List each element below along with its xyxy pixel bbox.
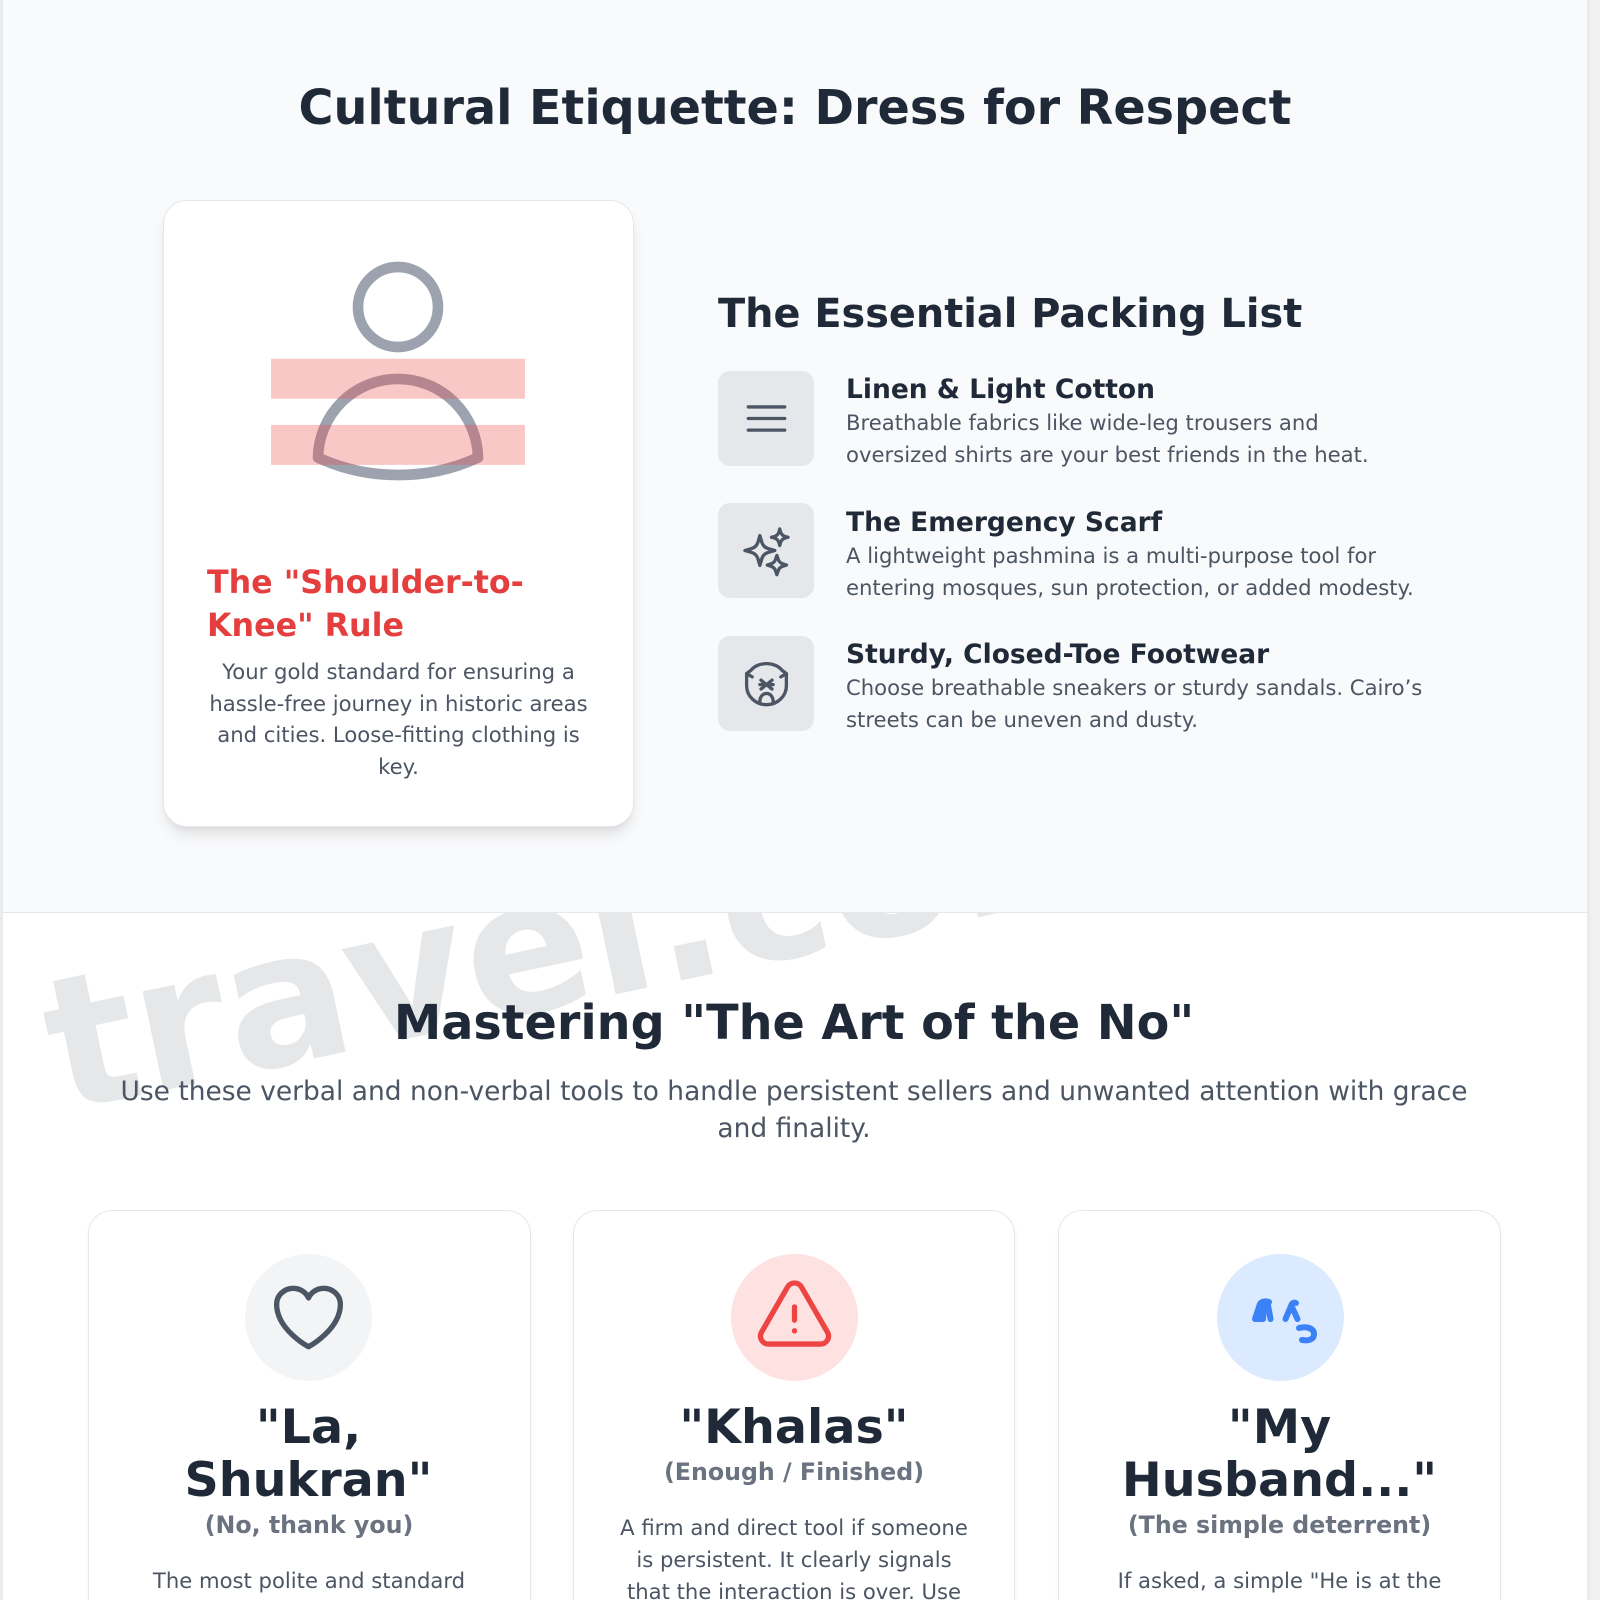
item: scarf: The Emergency Scarf: [846, 507, 1162, 538]
khalas text: is persistent. It clearly signals: [636, 1547, 952, 1572]
item: footwear: Sturdy, Closed-Toe Footwear: [846, 639, 1269, 670]
card heading: [207, 565, 524, 644]
intro text: Use these verbal and non-verbal tools to handle persistent sellers and unwanted attention with grace: [120, 1076, 1468, 1107]
icon: footwear: [718, 636, 814, 731]
card text: [209, 659, 588, 779]
panel: la shukran: [88, 1210, 531, 1600]
la shukran heading: [185, 1400, 432, 1508]
watermark: travel.com: [26, 712, 1161, 1155]
icon: heart: [245, 1254, 372, 1381]
heading: packing list: The Essential Packing List: [718, 291, 1302, 337]
my husband subtitle: (The simple deterrent): [1128, 1511, 1431, 1539]
panel: shoulder-to-knee rule card: [163, 200, 634, 827]
la shukran heading: Shukran": [185, 1453, 432, 1508]
panel: my husband: [1058, 1210, 1501, 1600]
title: Cultural Etiquette: Dress for Respect: [299, 81, 1291, 136]
section: art of the no: [3, 913, 1587, 1600]
icon: linen: [718, 371, 814, 466]
khalas text: [620, 1515, 968, 1600]
card heading: Knee" Rule: [207, 608, 404, 644]
item: footwear: streets can be uneven and dusty.: [846, 707, 1198, 732]
intro text: [120, 1076, 1468, 1144]
la shukran subtitle: (No, thank you): [205, 1511, 413, 1539]
icon: gesture: [1217, 1254, 1344, 1381]
item: scarf: [846, 507, 1414, 600]
la shukran text: The most polite and standard: [153, 1568, 465, 1593]
my husband text: If asked, a simple "He is at the: [1118, 1568, 1441, 1593]
my husband heading: Husband...": [1122, 1453, 1437, 1508]
card text: and cities. Loose-fitting clothing is: [217, 722, 580, 747]
la shukran heading: "La,: [256, 1400, 361, 1455]
intro text: and finality.: [717, 1113, 871, 1144]
panel: khalas: [573, 1210, 1015, 1600]
section: dress for respect: [3, 0, 1587, 913]
item: footwear: [846, 639, 1422, 732]
item: linen: Linen & Light Cotton: [846, 374, 1155, 405]
card text: Your gold standard for ensuring a: [222, 659, 575, 684]
item: linen: [846, 374, 1369, 467]
card heading: The "Shoulder-to-: [207, 565, 524, 601]
icon: scarf: [718, 503, 814, 598]
item: scarf: entering mosques, sun protection, or added modesty.: [846, 575, 1414, 600]
card text: key.: [378, 754, 419, 779]
heading: art of the no: Mastering "The Art of the No": [394, 996, 1194, 1051]
khalas heading: "Khalas": [679, 1400, 909, 1455]
icon: person with coverage bands: [271, 262, 525, 480]
item: scarf: A lightweight pashmina is a multi-purpose tool for: [846, 543, 1376, 568]
khalas text: A firm and direct tool if someone: [620, 1515, 968, 1540]
my husband heading: "My: [1228, 1400, 1331, 1455]
item: footwear: Choose breathable sneakers or sturdy sandals. Cairo’s: [846, 675, 1422, 700]
icon: warning: [730, 1254, 858, 1381]
card text: hassle-free journey in historic areas: [209, 691, 588, 716]
my husband heading: [1122, 1400, 1437, 1508]
khalas subtitle: (Enough / Finished): [664, 1458, 924, 1486]
item: linen: Breathable fabrics like wide-leg trousers and: [846, 410, 1319, 435]
item: linen: oversized shirts are your best friends in the heat.: [846, 442, 1369, 467]
